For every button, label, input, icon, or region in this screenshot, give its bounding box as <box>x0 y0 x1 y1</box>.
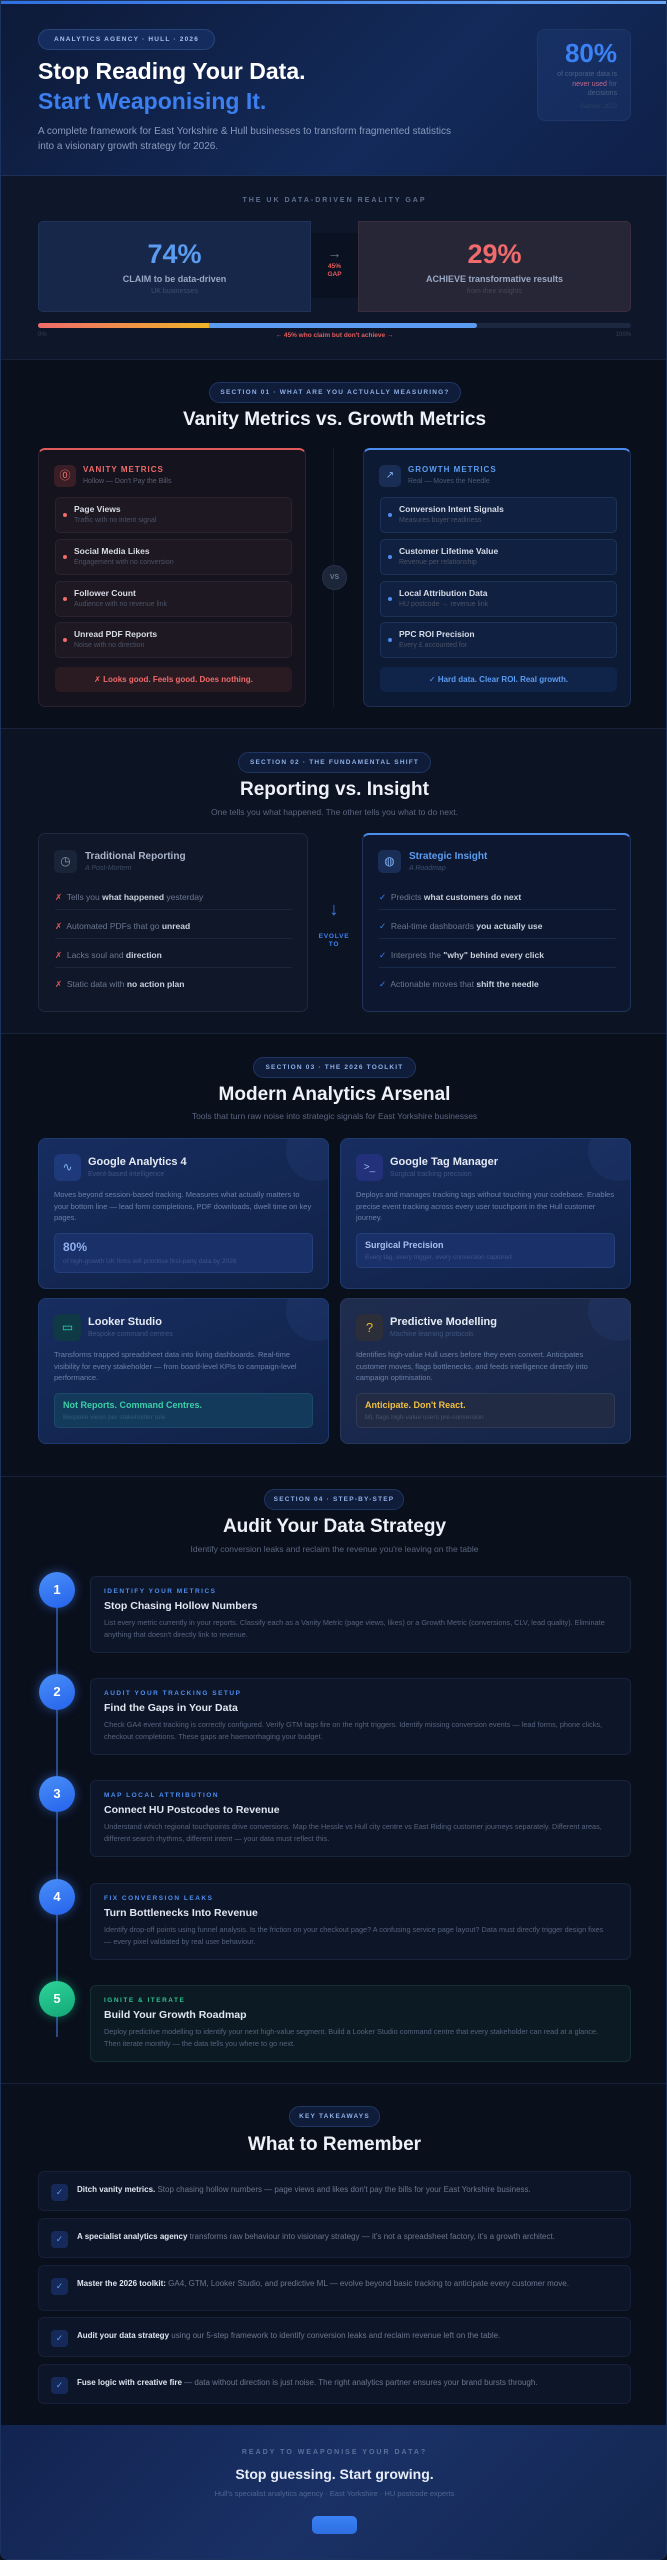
gap label: THE UK DATA-DRIVEN REALITY GAP <box>242 197 427 204</box>
callout <box>356 1233 615 1268</box>
icon: clock: ◷ <box>60 854 71 868</box>
panel: strategic insight: ✓ Real-time dashboards you actually use <box>379 921 543 931</box>
step 5 <box>39 1981 75 2017</box>
hero badge: ANALYTICS AGENCY · HULL · 2026 <box>54 36 199 43</box>
panel: growth metrics: PPC ROI Precision <box>399 629 475 639</box>
bar labels: 0% <box>38 332 47 338</box>
step 4 <box>39 1879 75 1915</box>
takeaway 2 <box>38 2218 631 2258</box>
icon: chart <box>54 1154 81 1181</box>
callout: Not Reports. Command Centres. <box>63 1400 202 1410</box>
icon: question <box>356 1314 383 1341</box>
takeaway 3: Master the 2026 toolkit: GA4, GTM, Looker Studio, and predictive ML — evolve beyond basic tracking to anticipate every customer move. <box>77 2279 569 2288</box>
card: looker studio: Transforms trapped spreadsheet data into living dashboards. Real-time visibility for every stakeholder — from board-level KPIs to campaign-level performance. <box>54 1350 297 1382</box>
section 01: vanity vs growth <box>1 359 667 728</box>
section 04: audit steps: List every metric currently in your reports. Classify each as a Vanity Metric (page views, likes) or a Growth Metric (conversions, CLV, lead quality). Eliminate anything that doesn't directly link to revenue. <box>104 1618 605 1638</box>
cta footer <box>1 2425 667 2560</box>
hero title accent: Start Weaponising It. <box>38 88 266 114</box>
section 04: audit steps: Check GA4 event tracking is correctly configured. Verify GTM tags fire on the right triggers. Identify missing conversion events — lead forms, phone clicks, checkout completions. These gaps are haemorrhaging your budget. <box>104 1720 602 1740</box>
section 02: reporting vs insight <box>1 728 667 1033</box>
callout: Anticipate. Don't React. <box>365 1400 466 1410</box>
gap arrow connector <box>311 233 358 298</box>
step 3: 3 <box>53 1786 61 1801</box>
stat callout: of high-growth UK firms will prioritise first-party data by 2026 <box>63 1258 236 1265</box>
hero intro text: A complete framework for East Yorkshire & Hull businesses to transform fragmented statistics into a visionary growth strategy for 2026. <box>38 126 451 152</box>
step 5: 5 <box>53 1991 61 2006</box>
card: google tag manager <box>340 1138 631 1289</box>
cta subline: Hull's specialist analytics agency · East Yorkshire · HU postcode experts <box>215 2489 454 2498</box>
growth items: Conversion Intent Signals <box>399 504 504 514</box>
panel: traditional reporting <box>38 833 308 1012</box>
icon: brain <box>378 850 401 873</box>
icon: monitor <box>54 1314 81 1341</box>
gap arrow connector: GAP <box>327 271 342 278</box>
card: looker studio: Bespoke command centres <box>88 1331 173 1338</box>
step 1: 1 <box>53 1582 61 1597</box>
takeaway 3: ✓ <box>56 2281 63 2291</box>
card: google tag manager: Google Tag Manager <box>390 1156 498 1168</box>
panel: growth metrics: HU postcode → revenue link <box>399 601 488 608</box>
insight header: Strategic Insight <box>409 851 487 862</box>
growth items <box>380 497 617 533</box>
stat callout: 80% <box>63 1240 87 1254</box>
panel: growth metrics <box>363 448 631 707</box>
vs badge: VS <box>330 574 339 581</box>
icon: clock <box>54 850 77 873</box>
panel: strategic insight: A Roadmap <box>409 865 446 872</box>
panel: vanity metrics: Hollow — Don't Pay the Bills <box>83 478 171 485</box>
card: 74% claim: 74% <box>147 239 202 269</box>
hero badge <box>38 29 215 50</box>
section 04: audit steps: Deploy predictive modelling to identify your next high-value segment. Build a Looker Studio command centre that every stakeholder can read at a glance. Then iterate monthly — the data tells you where to go next. <box>104 2027 598 2048</box>
takeaway 1: ✓ <box>56 2187 63 2197</box>
panel: growth metrics: Every £ accounted for <box>399 642 467 649</box>
card: looker studio: Looker Studio <box>88 1316 162 1328</box>
section heading: Modern Analytics Arsenal <box>219 1084 450 1105</box>
progress bar <box>38 323 631 328</box>
stat box: 80% <box>537 29 631 121</box>
icon: terminal <box>356 1154 383 1181</box>
card: predictive modelling: Identifies high-value Hull users before they even convert. Anticipates customer moves, flags bottlenecks, and feeds intelligence directly into campaign optimisation. <box>356 1350 588 1382</box>
icon: warning: ⓪ <box>60 470 70 482</box>
section pill: KEY TAKEAWAYS <box>299 2113 370 2120</box>
stat box: 80%: decisions <box>588 90 617 97</box>
panel: vanity metrics: Social Media Likes <box>74 546 150 556</box>
card: google tag manager: Surgical tracking precision <box>390 1171 472 1178</box>
section pill: SECTION 04 · STEP-BY-STEP <box>274 1496 394 1503</box>
panel: traditional reporting: ✗ Automated PDFs that go unread <box>55 921 190 931</box>
callout <box>54 1393 313 1428</box>
section 04: audit steps: IDENTIFY YOUR METRICS <box>104 1588 217 1595</box>
panel: traditional reporting: ✗ Static data with no action plan <box>55 979 184 989</box>
panel: vanity metrics: Noise with no direction <box>74 642 144 649</box>
takeaway 5: ✓ <box>56 2380 63 2390</box>
hero title: Stop Reading Your Data. <box>38 58 306 84</box>
card: looker studio <box>38 1298 329 1444</box>
stat box: 80%: Gartner, 2023 <box>580 104 617 110</box>
vanity verdict <box>55 667 292 692</box>
card: 29% achieve: 29% <box>467 239 522 269</box>
section 04: audit steps <box>1 1476 667 2083</box>
section pill <box>289 2106 380 2127</box>
growth header: GROWTH METRICS <box>408 465 497 474</box>
section 04: audit steps: Find the Gaps in Your Data <box>104 1702 238 1714</box>
section heading: What to Remember <box>248 2134 421 2155</box>
card: 29% achieve <box>358 221 631 312</box>
callout <box>356 1393 615 1428</box>
vanity items <box>55 497 292 533</box>
panel: strategic insight <box>362 833 631 1012</box>
stat box: 80%: never used for <box>572 80 617 88</box>
traditional rows: ✗ Tells you what happened yesterday <box>55 892 203 902</box>
panel: vanity metrics: Engagement with no conversion <box>74 559 174 566</box>
section heading: Vanity Metrics vs. Growth Metrics <box>183 409 486 430</box>
takeaway 3 <box>38 2265 631 2311</box>
section 04: audit steps: Build Your Growth Roadmap <box>104 2009 247 2021</box>
stat box: 80%: of corporate data is <box>557 71 617 78</box>
step 1 <box>39 1572 75 1608</box>
callout: Surgical Precision <box>365 1240 444 1250</box>
section subtitle: Identify conversion leaks and reclaim the revenue you're leaving on the table <box>191 1544 478 1554</box>
card: google tag manager: Deploys and manages tracking tags without touching your codebase. Enables precise event tracking across every user touchpoint in the Hull customer journey. <box>356 1190 614 1222</box>
arrow: evolve to <box>319 899 349 948</box>
card: predictive modelling: Predictive Modelling <box>390 1316 497 1328</box>
section pill <box>253 1057 416 1078</box>
panel: vanity metrics: Follower Count <box>74 588 136 598</box>
insight rows: ✓ Predicts what customers do next <box>379 892 521 902</box>
section 03: analytics arsenal <box>1 1033 667 1476</box>
takeaway 1: Ditch vanity metrics. Stop chasing hollow numbers — page views and likes don't pay the bills for your East Yorkshire business. <box>77 2185 531 2194</box>
card: predictive modelling <box>340 1298 631 1444</box>
stat callout <box>54 1233 313 1273</box>
section 04: audit steps: Identify drop-off points using funnel analysis. Is the friction on your checkout page? A confusing service page layout? Data must directly trigger design fixes — every pixel validated by real user behaviour. <box>104 1925 603 1946</box>
section 04: audit steps: Understand which regional touchpoints drive conversions. Map the Hessle vs Hull city centre vs East Riding customer journeys separately. Different areas, different search rhythms, different intent — your data must reflect this. <box>104 1822 602 1842</box>
section 04: audit steps: IGNITE & ITERATE <box>104 1997 185 2004</box>
takeaway 1 <box>38 2171 631 2211</box>
card: 74% claim <box>38 221 311 312</box>
panel: growth metrics: Real — Moves the Needle <box>408 478 490 485</box>
growth verdict: ✓ Hard data. Clear ROI. Real growth. <box>429 675 568 684</box>
section 04: audit steps: Stop Chasing Hollow Numbers <box>104 1600 257 1612</box>
icon: terminal: >_ <box>364 1162 375 1173</box>
callout: Every tag, every trigger, every conversion captured <box>365 1254 512 1261</box>
hero section <box>1 1 667 176</box>
section pill: SECTION 01 · WHAT ARE YOU ACTUALLY MEASURING? <box>220 389 450 396</box>
growth items: Measures buyer readiness <box>399 517 482 524</box>
panel: vanity metrics <box>38 448 306 707</box>
icon: chart: ∿ <box>62 1160 73 1174</box>
section: key takeaways <box>1 2083 667 2425</box>
section 04: audit steps: MAP LOCAL ATTRIBUTION <box>104 1792 219 1799</box>
panel: growth metrics: Revenue per relationship <box>399 559 477 566</box>
panel: growth metrics: Local Attribution Data <box>399 588 487 598</box>
vs badge <box>322 565 347 590</box>
panel: traditional reporting: A Post-Mortem <box>85 865 131 872</box>
card: google analytics 4: Google Analytics 4 <box>88 1156 187 1168</box>
section pill <box>238 752 431 773</box>
section pill: SECTION 02 · THE FUNDAMENTAL SHIFT <box>250 759 419 766</box>
callout: ML flags high-value users pre-conversion <box>365 1414 484 1421</box>
step 2 <box>39 1674 75 1710</box>
gap arrow connector: → <box>328 245 342 261</box>
panel: strategic insight: ✓ Actionable moves that shift the needle <box>379 979 539 989</box>
section 04: audit steps: FIX CONVERSION LEAKS <box>104 1895 213 1902</box>
card: google analytics 4 <box>38 1138 329 1289</box>
takeaway 2: A specialist analytics agency transforms raw behaviour into visionary strategy — it's not a spreadsheet factory, it's a growth architect. <box>77 2232 555 2241</box>
stat box: 80%: 80% <box>565 38 617 68</box>
icon: warning <box>54 465 76 487</box>
section 04: audit steps: AUDIT YOUR TRACKING SETUP <box>104 1690 241 1697</box>
vanity items: Page Views <box>74 504 121 514</box>
cta label: READY TO WEAPONISE YOUR DATA? <box>242 2449 427 2456</box>
section subtitle: Tools that turn raw noise into strategic signals for East Yorkshire businesses <box>192 1111 477 1121</box>
takeaway 4: ✓ <box>56 2333 63 2343</box>
panel: traditional reporting: ✗ Lacks soul and direction <box>55 950 162 960</box>
callout: Bespoke views per stakeholder role <box>63 1414 166 1421</box>
center divider + vs <box>333 448 334 707</box>
panel: strategic insight: ✓ Interprets the "why" behind every click <box>379 950 544 960</box>
traditional header: Traditional Reporting <box>85 851 186 862</box>
cta button <box>312 2516 357 2534</box>
panel: vanity metrics: Unread PDF Reports <box>74 629 157 639</box>
icon: question: ? <box>366 1320 373 1335</box>
section heading: Audit Your Data Strategy <box>223 1516 446 1537</box>
timeline line <box>56 1590 58 2037</box>
vanity header: VANITY METRICS <box>83 465 164 474</box>
section pill: SECTION 03 · THE 2026 TOOLKIT <box>266 1064 403 1071</box>
section pill <box>209 382 461 403</box>
reality gap section: 100% <box>616 332 631 338</box>
takeaway 4: Audit your data strategy using our 5-step framework to identify conversion leaks and reclaim revenue left on the table. <box>77 2331 500 2340</box>
step 3 <box>39 1776 75 1812</box>
takeaway 4 <box>38 2317 631 2357</box>
icon: brain: ◍ <box>384 854 395 868</box>
card: 29% achieve: from their insights <box>467 288 522 295</box>
growth verdict <box>380 667 617 692</box>
vanity verdict: ✗ Looks good. Feels good. Does nothing. <box>94 675 253 684</box>
card: 29% achieve: ACHIEVE transformative results <box>426 274 563 284</box>
icon: trend: ↗ <box>386 470 394 481</box>
panel: growth metrics: Customer Lifetime Value <box>399 546 498 556</box>
section heading: Reporting vs. Insight <box>240 779 429 800</box>
card: 74% claim: UK businesses <box>151 288 198 295</box>
arrow: evolve to: TO <box>329 941 339 948</box>
takeaway 5: Fuse logic with creative fire — data without direction is just noise. The right analytics partner ensures your brand bursts through. <box>77 2378 538 2387</box>
reality gap section <box>1 176 667 359</box>
step 4: 4 <box>53 1889 61 1904</box>
icon: monitor: ▭ <box>62 1320 73 1334</box>
section pill <box>264 1489 404 1510</box>
top accent bar <box>1 1 667 4</box>
reality gap section: ← 45% who claim but don't achieve → <box>276 332 393 339</box>
vanity items: Traffic with no intent signal <box>74 517 156 524</box>
card: google analytics 4: Moves beyond session-based tracking. Measures what actually matters to your bottom line — lead form completions, PDF downloads, dwell time on key pages. <box>54 1190 311 1222</box>
card: 74% claim: CLAIM to be data-driven <box>123 274 226 284</box>
icon: trend <box>379 465 401 487</box>
card: google analytics 4: Event-based intelligence <box>88 1171 164 1178</box>
section 04: audit steps: Turn Bottlenecks Into Revenue <box>104 1907 258 1919</box>
section subtitle: One tells you what happened. The other tells you what to do next. <box>211 807 458 817</box>
section 04: audit steps: Connect HU Postcodes to Revenue <box>104 1804 280 1816</box>
step 2: 2 <box>53 1684 61 1699</box>
arrow: evolve to: ↓ <box>330 899 338 919</box>
takeaway 5 <box>38 2364 631 2404</box>
panel: vanity metrics: Audience with no revenue link <box>74 601 167 608</box>
card: predictive modelling: Machine learning protocols <box>390 1331 474 1338</box>
cta headline: Stop guessing. Start growing. <box>235 2466 434 2482</box>
gap arrow connector: 45% <box>328 263 341 270</box>
takeaway 2: ✓ <box>56 2234 63 2244</box>
arrow: evolve to: EVOLVE <box>319 933 349 940</box>
